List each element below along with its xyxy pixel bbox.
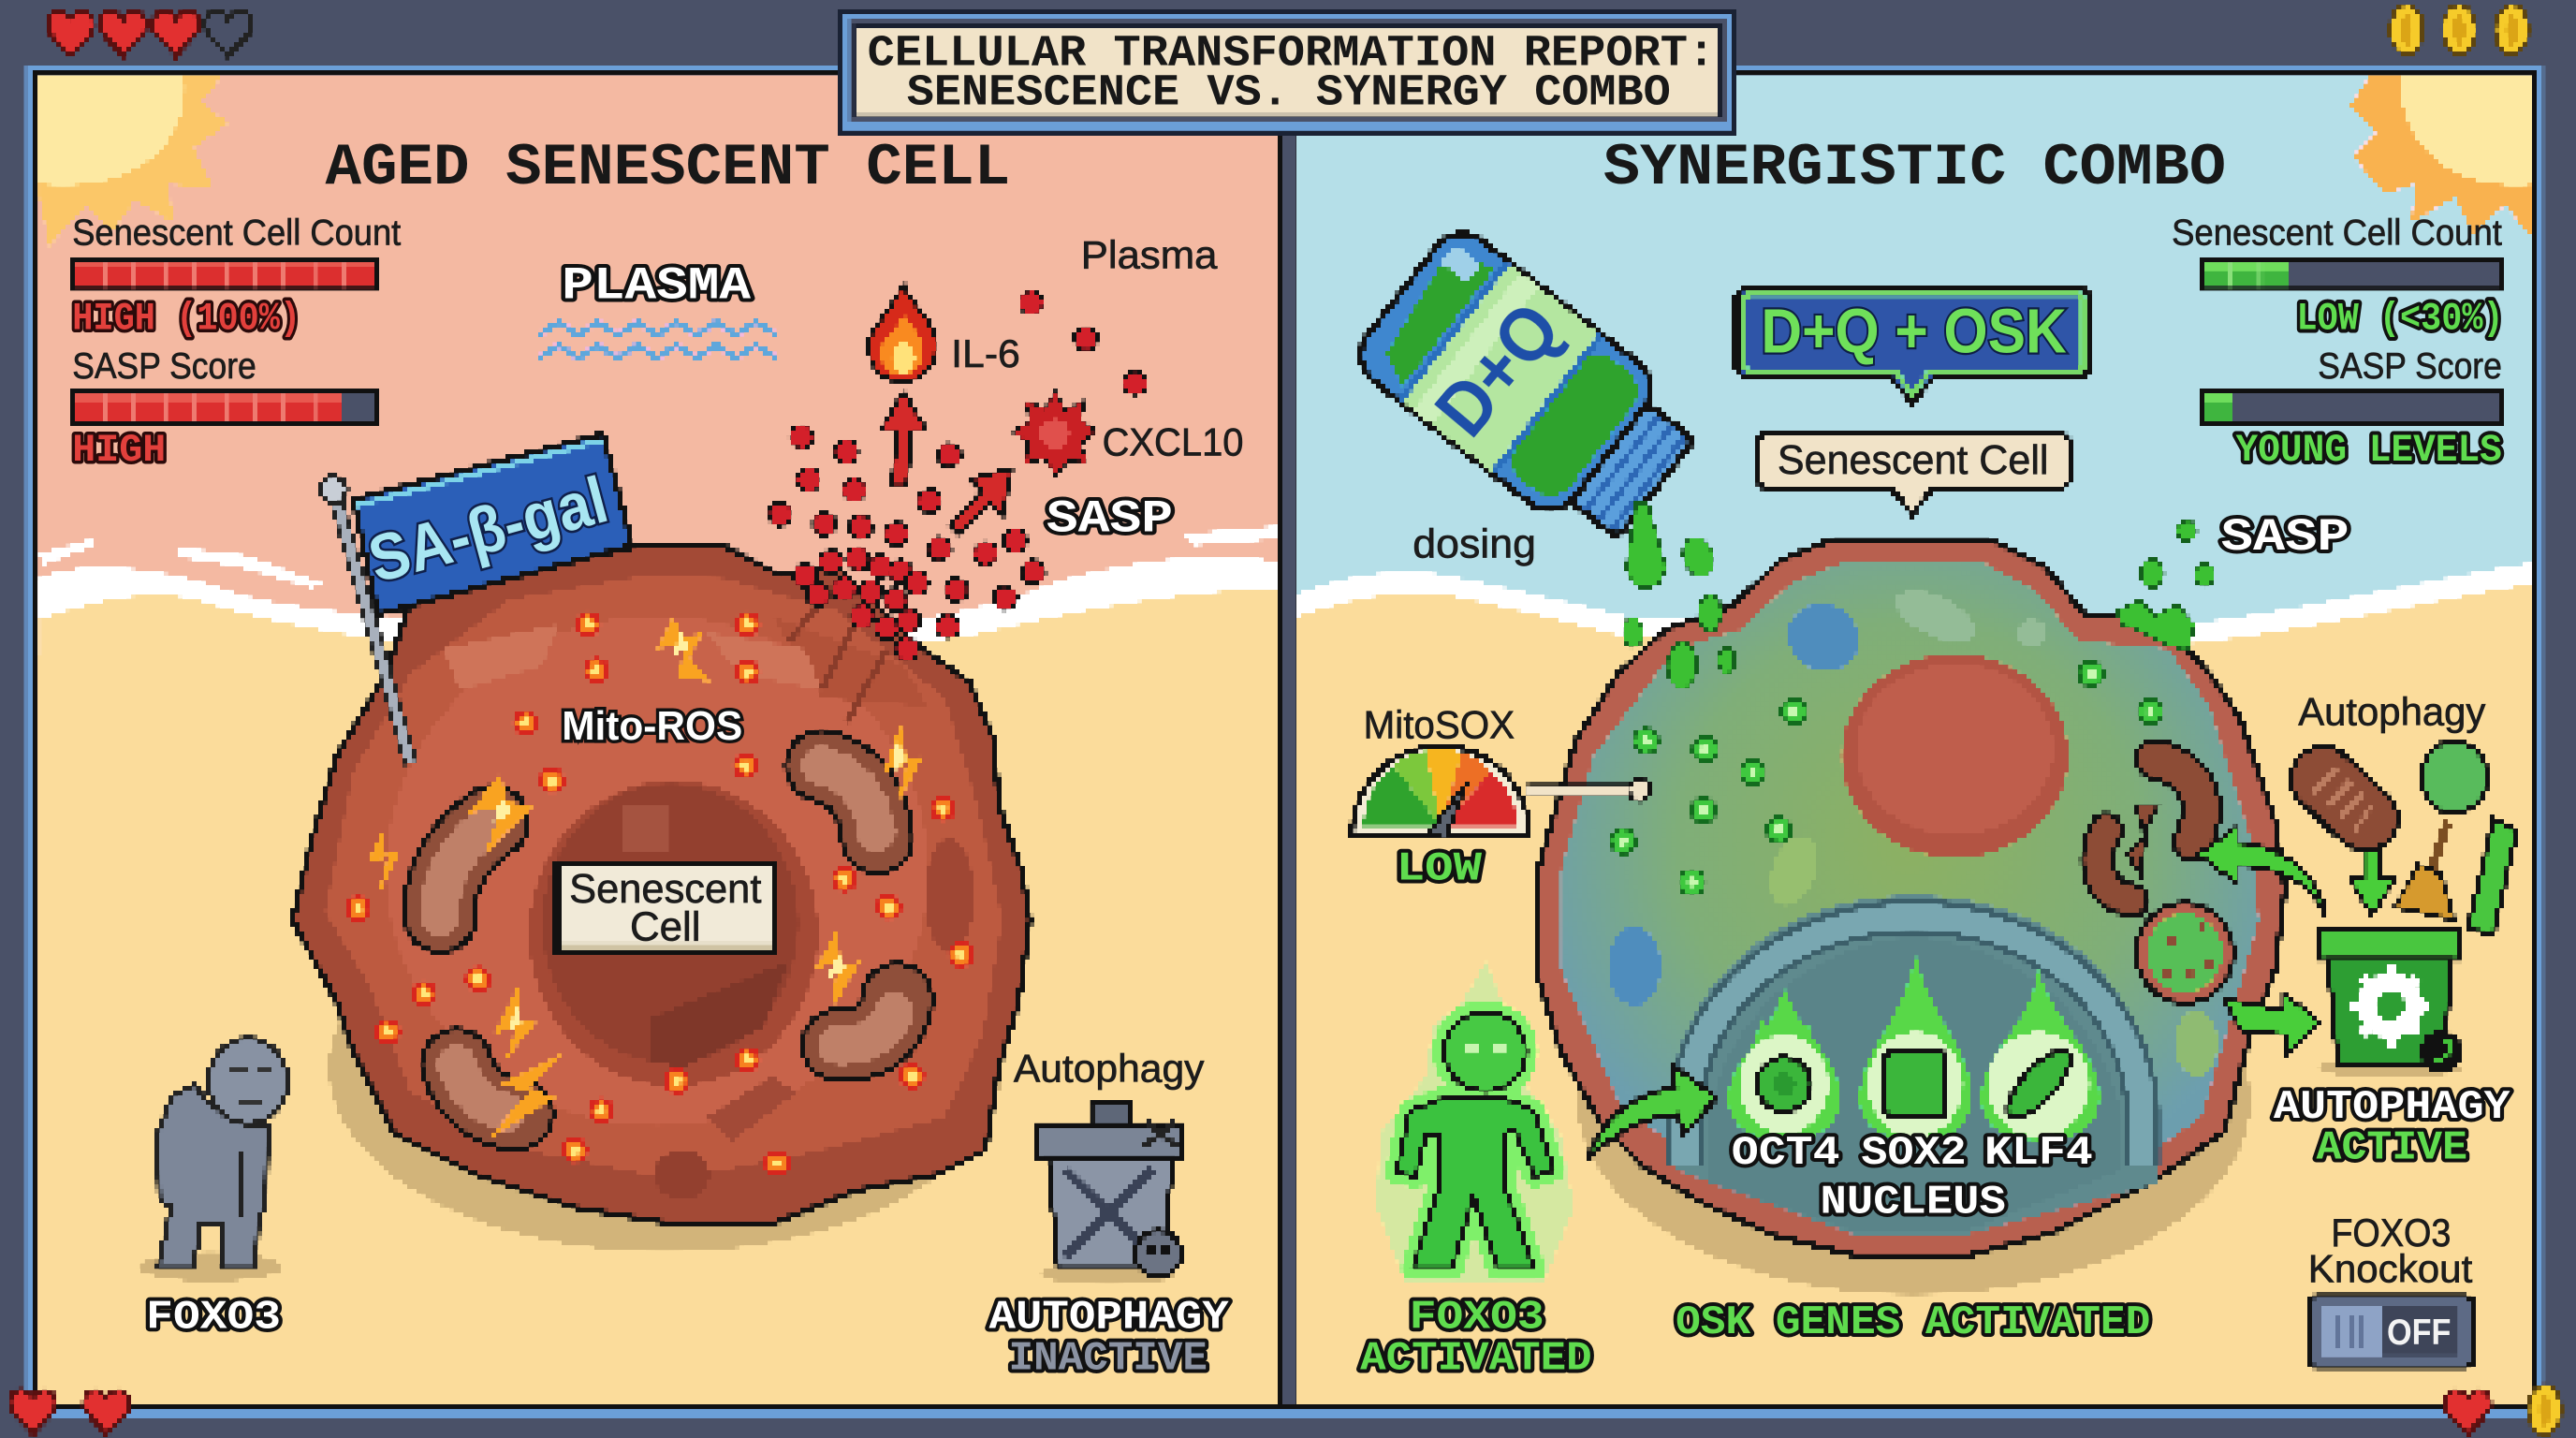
gauge: MitoSOX low — [1352, 746, 1650, 838]
sun left — [39, 77, 228, 246]
beach foam — [1295, 562, 2537, 657]
left scene labels: CXCL10 — [1103, 420, 1244, 464]
right scene labels: D+Q — [1419, 287, 1577, 452]
cell shadow — [1577, 907, 2250, 1295]
nucleus dome — [1666, 895, 2159, 1236]
left metrics: Senescent Cell Count — [72, 213, 401, 254]
SA-beta-gal flag — [320, 433, 633, 764]
green recycling bin — [2318, 818, 2517, 1078]
SASP particles erupting — [768, 289, 1149, 662]
panel: synergistic combo scene — [1295, 77, 2537, 1406]
green bubbles in cytoplasm — [1609, 660, 2164, 896]
left scene labels: Autophagy — [1014, 1046, 1204, 1090]
right scene labels: ACTIVATED — [1360, 1335, 1592, 1382]
left scene labels: Senescent — [569, 866, 761, 912]
virus icon: CXCL10 — [1014, 391, 1097, 477]
right scene labels: FOXO3 — [2331, 1211, 2451, 1255]
gray FOXO3 figure — [138, 1038, 287, 1282]
coins — [2389, 4, 2530, 56]
left scene labels: IL-6 — [951, 331, 1020, 375]
bottle: D+Q — [1348, 221, 1710, 559]
right scene labels: Senescent Cell — [1778, 437, 2048, 483]
left metrics: HIGH — [72, 428, 166, 473]
left scene labels: SASP — [1046, 493, 1173, 546]
left metrics: HIGH (100%) — [72, 296, 300, 341]
title — [868, 29, 1715, 119]
right metrics: YOUNG LEVELS — [2236, 428, 2502, 473]
broom — [2395, 822, 2454, 920]
cell shadow — [329, 884, 1003, 1252]
mitochondrial ROS sparks — [345, 611, 974, 1177]
right metrics: LOW (<30%) — [2296, 296, 2504, 341]
right scene labels: OSK GENES ACTIVATED — [1676, 1299, 2150, 1346]
right scene labels: dosing — [1412, 521, 1536, 566]
right metrics: SASP Score — [2318, 346, 2502, 387]
left scene labels: SA-β-gal — [361, 462, 615, 596]
left scene labels: Plasma — [1081, 233, 1218, 277]
arrow to nucleus — [1587, 1064, 1717, 1160]
flame icon: IL-6 — [869, 283, 936, 381]
broken mitochondria — [2099, 759, 2201, 901]
panel: aged senescent cell scene — [39, 77, 1280, 1406]
renewed cell body — [1538, 539, 2285, 1255]
bottom hearts and coin — [10, 1384, 2563, 1436]
right scene labels: Autophagy — [2298, 689, 2485, 733]
title: SENESCENCE VS. SYNERGY COMBO — [907, 69, 1671, 119]
green drip and droplets — [1623, 503, 2215, 688]
lives: hearts — [48, 11, 252, 56]
right scene labels: SASP — [2221, 511, 2349, 564]
right scene labels: AUTOPHAGY — [2274, 1084, 2510, 1131]
status bars left — [70, 257, 379, 426]
nucleolus — [1841, 653, 2069, 858]
right scene labels: LOW — [1397, 845, 1483, 892]
senescent cell label box — [557, 862, 775, 953]
right metrics — [2172, 213, 2504, 473]
left scene labels: INACTIVE — [1009, 1335, 1208, 1382]
right metrics: Senescent Cell Count — [2172, 213, 2502, 254]
right scene labels: SOX2 — [1861, 1130, 1967, 1177]
green FOXO3 figure — [1377, 961, 1573, 1282]
right heading: SYNERGISTIC COMBO — [1603, 134, 2226, 201]
speech bubble: Senescent Cell — [1758, 433, 2070, 514]
status bars right — [2198, 257, 2505, 426]
title plaque — [842, 11, 1734, 131]
autophagy arrows — [2198, 827, 2395, 1055]
beach sand — [39, 588, 1278, 1406]
right scene labels: OFF — [2387, 1313, 2451, 1353]
senescent cell body — [292, 546, 1030, 1224]
right scene labels: OCT4 — [1732, 1130, 1840, 1177]
autophagy cargo: mitochondrion and lysosome — [2323, 741, 2487, 818]
right scene labels: FOXO3 — [1410, 1295, 1544, 1342]
left scene labels: PLASMA — [562, 259, 752, 312]
sun right — [2349, 77, 2537, 243]
beach foam — [39, 526, 1278, 657]
right scene labels: D+Q + OSK — [1761, 298, 2067, 367]
right scene labels: ACTIVE — [2317, 1125, 2467, 1172]
left scene labels: FOXO3 — [146, 1295, 281, 1342]
FOXO3 knockout toggle — [2308, 1297, 2474, 1367]
OSK gene flames — [1728, 953, 2100, 1140]
right scene labels: MitoSOX — [1364, 702, 1515, 746]
right scene labels: KLF4 — [1984, 1130, 2093, 1177]
left metrics — [72, 213, 401, 473]
lysosome — [2134, 901, 2236, 1005]
mitochondria — [440, 766, 897, 1114]
title: CELLULAR TRANSFORMATION REPORT: — [868, 29, 1715, 79]
right scene labels: Knockout — [2308, 1246, 2473, 1290]
left scene labels: Mito-ROS — [562, 703, 742, 749]
plasma waves — [539, 322, 777, 359]
left scene labels — [146, 233, 1244, 1382]
beach sand — [1295, 583, 2537, 1406]
left scene labels: AUTOPHAGY — [989, 1295, 1229, 1342]
right scene labels — [1360, 287, 2510, 1382]
left scene labels: Cell — [630, 903, 701, 949]
nucleus — [529, 781, 818, 1086]
right scene labels: NUCLEUS — [1821, 1180, 2006, 1226]
left heading: AGED SENESCENT CELL — [325, 134, 1010, 201]
left metrics: SASP Score — [72, 346, 256, 387]
red arrows — [881, 391, 1012, 536]
speech bubble: D+Q + OSK — [1736, 287, 2089, 403]
inactive trash can — [1038, 1104, 1183, 1284]
